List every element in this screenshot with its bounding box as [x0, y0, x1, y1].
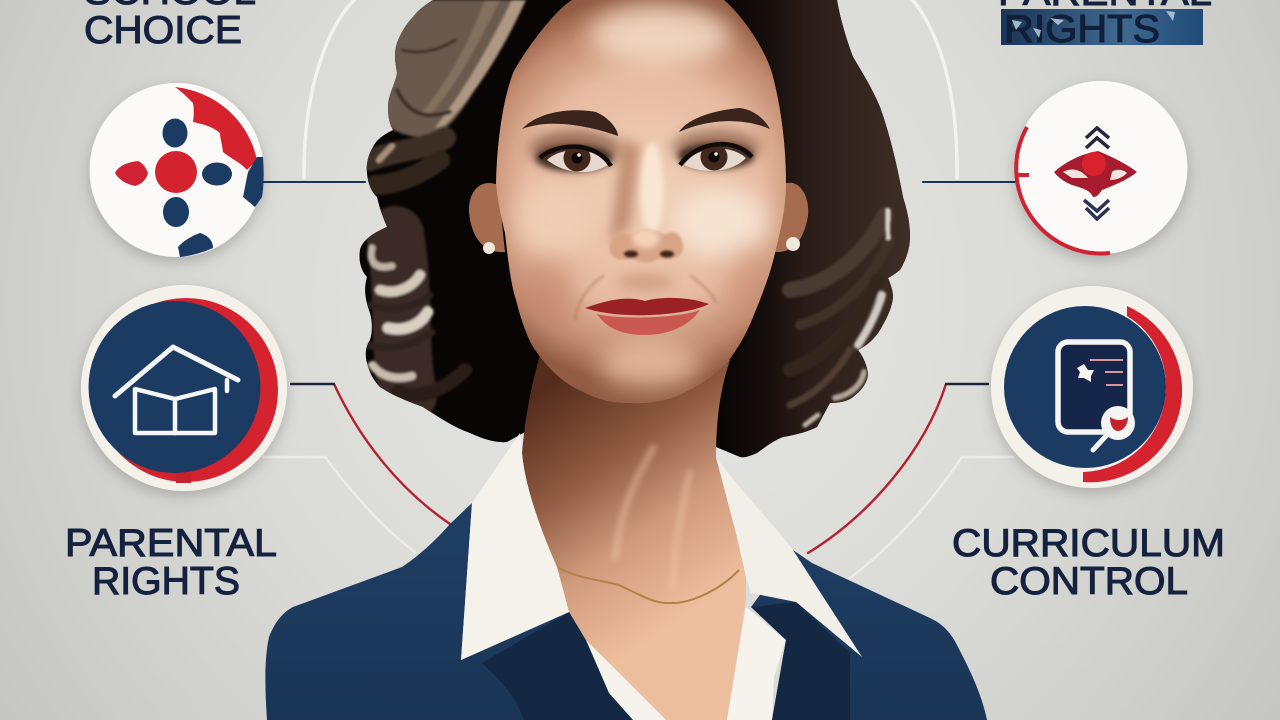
jacket: [265, 503, 987, 720]
top navy blob: [162, 118, 188, 148]
hair: [350, 0, 920, 460]
label: parental rights: PARENTAL: [65, 522, 277, 565]
icon: parental rights circle: [81, 285, 287, 491]
shirt lower panels: [586, 607, 786, 720]
document icon: [1058, 342, 1130, 432]
connector lines: [263, 0, 1017, 578]
right navy blob: [202, 162, 232, 186]
bottom navy blob: [163, 197, 189, 227]
upper left mass: [385, 0, 525, 137]
heading: parental rights, top right: [998, 0, 1212, 51]
icon: curriculum control circle: [991, 286, 1193, 488]
icon: mortarboard house: [115, 347, 238, 433]
eye sockets: [529, 130, 621, 170]
red rim: [1016, 127, 1110, 253]
right eye: [678, 143, 754, 171]
shadow folds: [397, 90, 450, 115]
face: [496, 0, 786, 404]
lower lobe upper left: [370, 138, 445, 160]
upper-left navy connector: [263, 181, 365, 183]
eye-like emblem: [1054, 151, 1137, 197]
left collar: [461, 433, 569, 660]
lower-right navy stub: [946, 383, 988, 385]
left red blob: [115, 161, 148, 186]
label: parental rights: [65, 522, 277, 603]
right bands: [790, 215, 885, 290]
icon: school choice circle: [90, 83, 264, 257]
inner lapels: [482, 602, 850, 720]
chevrons down: [1084, 200, 1109, 219]
heading: school choice: CHOICE: [84, 9, 242, 52]
right collar: [716, 457, 862, 657]
heading: parental rights, top right: RIGHTS: [1004, 8, 1160, 51]
lower left curls: [371, 248, 392, 267]
nose: [610, 228, 683, 262]
lips: [585, 298, 709, 335]
chevrons up: [1086, 128, 1109, 148]
light streak: [435, 0, 526, 128]
lower navy blob: [178, 233, 213, 257]
navy segment: [243, 157, 264, 207]
hair brown masses: [368, 0, 890, 425]
top-left white arc: [304, 0, 354, 178]
ears: [469, 183, 505, 252]
left eye: [536, 144, 612, 172]
red segment: [175, 87, 257, 170]
top-right white arc: [913, 0, 957, 178]
lower-left navy stub: [291, 383, 334, 385]
neck: [522, 355, 746, 720]
lower-right white connector: [850, 457, 1013, 578]
lower left brown base: [395, 235, 408, 395]
eyebrows: [522, 110, 618, 136]
label: parental rights: RIGHTS: [92, 560, 240, 603]
icon: upper-right circle: [1014, 81, 1188, 254]
necklace: [555, 566, 739, 603]
portrait: [265, 0, 987, 720]
lower-right red connector: [808, 384, 946, 553]
label: curriculum control: CURRICULUM: [952, 522, 1225, 565]
label: curriculum control: CONTROL: [990, 560, 1188, 603]
nasolabial lines: [575, 275, 604, 320]
earrings: [483, 237, 800, 254]
upper-right navy connector: [923, 181, 1017, 183]
label: curriculum control: [952, 522, 1225, 603]
nose shading: [610, 140, 640, 245]
lower-left red connector: [334, 384, 450, 524]
lower-left white connector: [263, 457, 415, 552]
magnifier seal: [1101, 406, 1135, 440]
centre red dot: [155, 151, 197, 193]
